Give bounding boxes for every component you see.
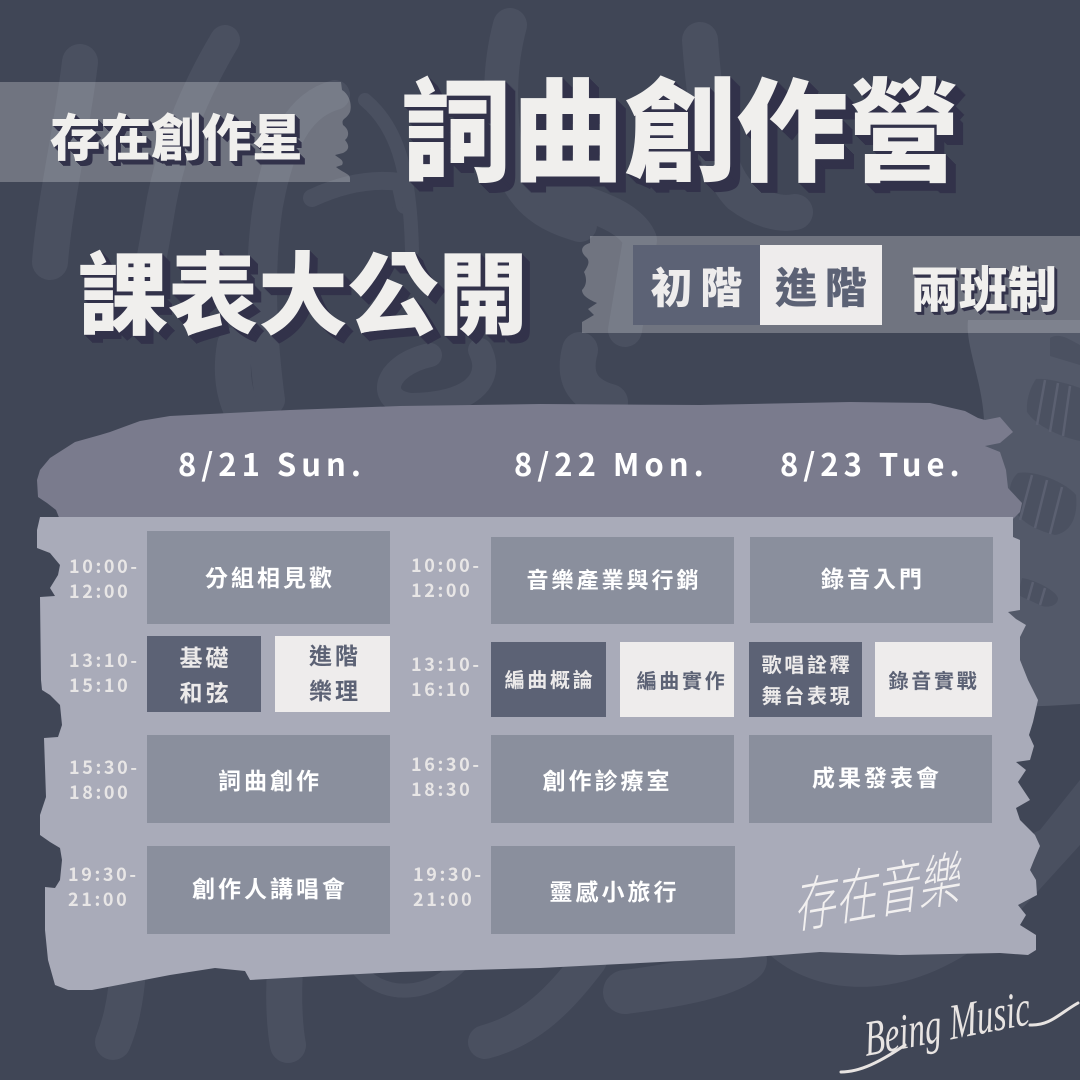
session: showcase: 成果發表會 [812, 758, 942, 792]
session: songwriting [147, 735, 390, 823]
session: vocal interpretation and stage performance: 舞台表現 [762, 680, 852, 709]
session: basic chords: 基礎 [180, 638, 232, 672]
time: day 2 slot 1: 10:00- 12:00 [411, 552, 482, 603]
session: advanced music theory: 進階 [309, 637, 361, 671]
time: day 1 slot 2: 13:10- 15:10 [69, 647, 140, 698]
session: music industry and marketing: 音樂產業與行銷 [526, 563, 702, 595]
date: August 21: 8/21 Sun. [178, 440, 366, 485]
time: day 2 slot 4: 19:30- 21:00 [413, 861, 484, 912]
time: day 1 slot 1: 10:00- 12:00 [69, 553, 140, 604]
session: recording intro [750, 537, 993, 623]
text: camp name: 存在創作星 [50, 97, 302, 171]
session: songwriting: 詞曲創作 [218, 762, 322, 796]
session: arrangement practice [620, 642, 734, 717]
session: inspiration trip [491, 846, 735, 934]
date: August 22: 8/22 Mon. [514, 440, 709, 485]
date: August 23: 8/23 Tue. [780, 440, 965, 485]
time: day 1 slot 4: 19:30- 21:00 [68, 861, 139, 912]
session: creative clinic [491, 735, 734, 823]
tag: beginner level [633, 245, 760, 325]
session: recording practice: 錄音實戰 [889, 665, 979, 694]
session: group meetup: 分組相見歡 [205, 559, 335, 593]
session: showcase [749, 735, 992, 823]
session: arrangement practice: 編曲實作 [637, 665, 727, 694]
tag: advanced level: 進階 [775, 254, 875, 316]
session: arrangement intro [491, 642, 606, 717]
tag: beginner level: 初階 [650, 254, 750, 316]
title: lyric and composition camp: 詞曲創作營 [400, 43, 960, 205]
session: inspiration trip: 靈感小旅行 [550, 872, 680, 906]
session: group meetup [147, 531, 390, 624]
session: recording intro: 錄音入門 [821, 560, 925, 594]
tag: advanced level [760, 245, 882, 325]
time: day 2 slot 3: 16:30- 18:30 [411, 751, 482, 802]
session: vocal interpretation and stage performance [749, 642, 862, 717]
heading: schedule reveal: 課表大公開 [78, 223, 528, 353]
session: vocal interpretation and stage performance: 歌唱詮釋 [762, 649, 852, 678]
session: advanced music theory [275, 636, 390, 712]
session: creative clinic: 創作診療室 [542, 762, 672, 796]
session: recording practice [875, 642, 992, 717]
session: songwriter concert: 創作人講唱會 [192, 870, 348, 904]
session: music industry and marketing [491, 537, 734, 624]
session: songwriter concert [147, 846, 390, 934]
time: day 1 slot 3: 15:30- 18:00 [69, 754, 140, 805]
session: arrangement intro: 編曲概論 [505, 664, 595, 693]
session: basic chords: 和弦 [180, 674, 232, 708]
session: basic chords [147, 636, 261, 712]
time: day 2 slot 2: 13:10- 16:10 [411, 651, 482, 702]
logo: Being Music handwritten Chinese: 存在音樂 [793, 830, 968, 946]
session: advanced music theory: 樂理 [309, 672, 361, 706]
text: two class system: 兩班制 [910, 251, 1057, 322]
